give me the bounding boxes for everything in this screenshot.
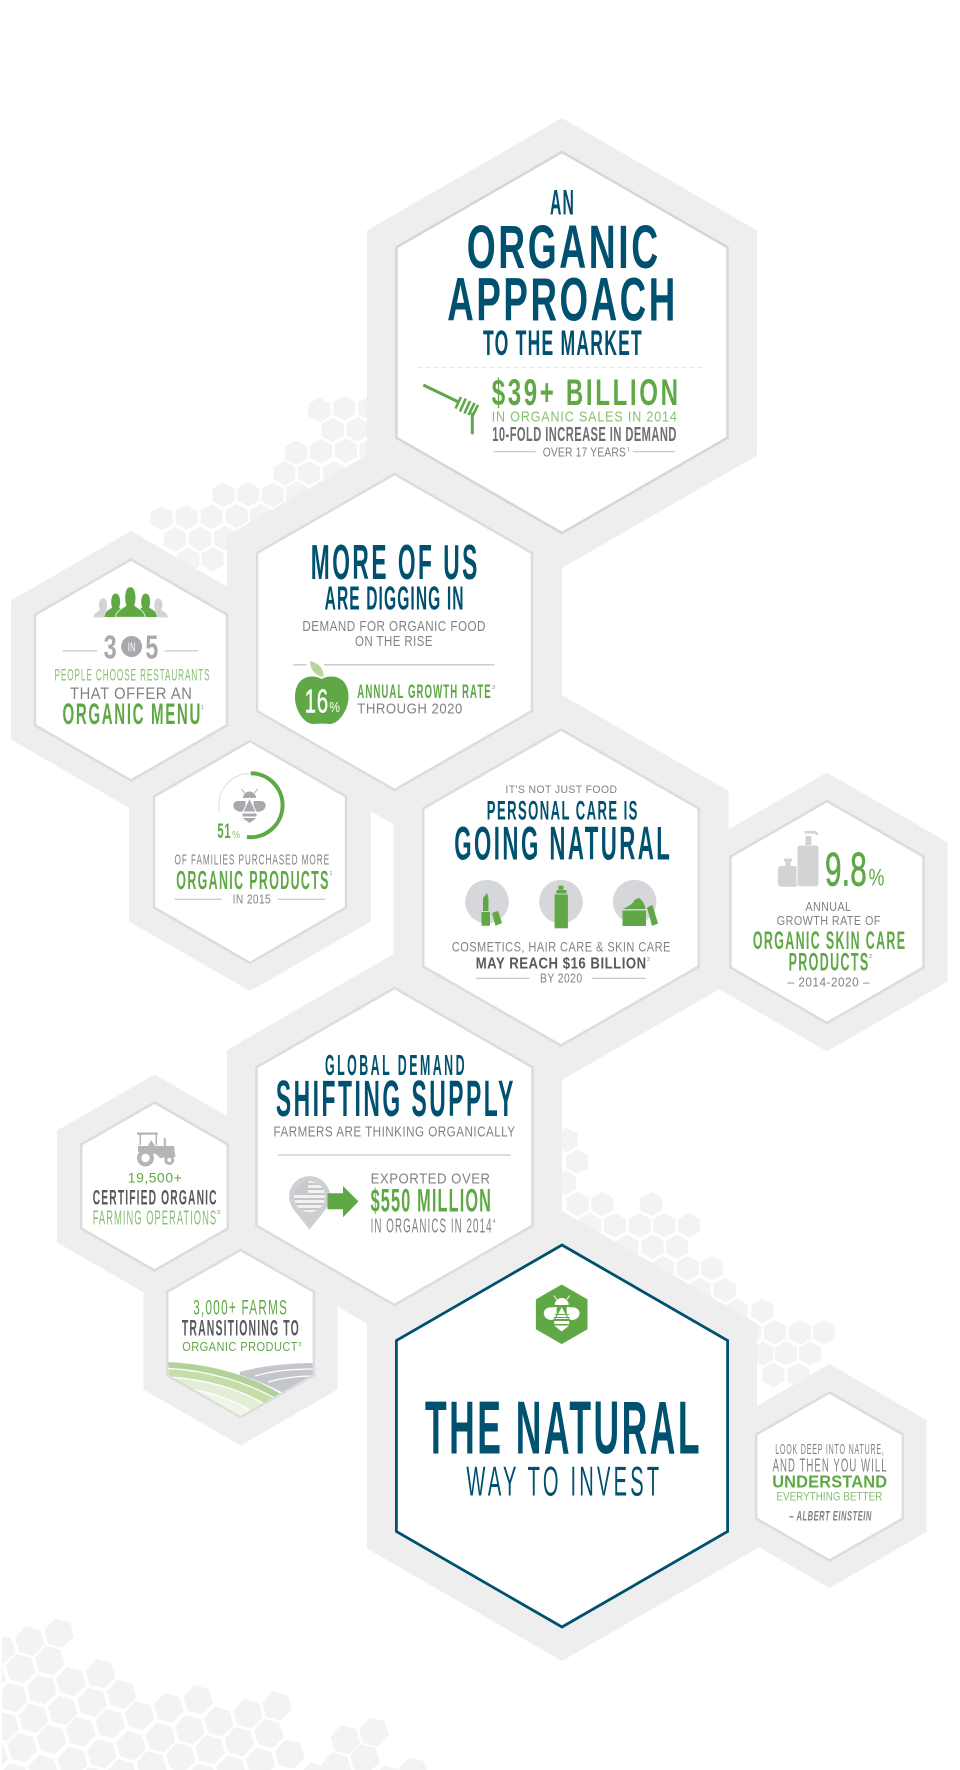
icon: skin care bottles: [778, 831, 819, 887]
heading: PERSONAL CARE IS: [487, 795, 639, 825]
illustration: fields: [168, 1362, 313, 1416]
subheading: ON THE RISE: [355, 634, 433, 650]
quote: – ALBERT EINSTEIN: [789, 1508, 872, 1524]
panel: global demand shifting supply: [256, 988, 532, 1305]
heading: [276, 1050, 516, 1127]
growth rate text: ANNUAL GROWTH RATE: [357, 681, 492, 703]
sales figure: 1: [627, 447, 630, 453]
farming text: 19,500+: [128, 1171, 182, 1186]
icon: apple 16%: %: [329, 699, 341, 716]
growth rate text: 3: [492, 685, 495, 691]
panel: 3 in 5: [35, 560, 227, 780]
sales figure: OVER 17 YEARS: [543, 445, 626, 459]
panel: more of us are digging in: [257, 474, 532, 790]
panel: 51% of families: [154, 741, 346, 963]
quote: UNDERSTAND: [772, 1472, 887, 1492]
icon: export arrow: [328, 1186, 358, 1217]
skin care text: – 2014-2020 –: [788, 976, 870, 990]
heading: [311, 535, 480, 616]
infographic canvas: SHIFTING SUPPLY: [276, 1070, 516, 1127]
growth figure: 9.8: [825, 843, 867, 896]
closing title: WAY TO INVEST: [466, 1458, 662, 1505]
export text: EXPORTED OVER: [371, 1171, 491, 1187]
farms text: 3,000+ FARMS: [193, 1296, 288, 1319]
icon: skin care jar: [613, 880, 658, 926]
3 in 5 statistic: IN: [128, 640, 136, 654]
icon: US map pin: [289, 1176, 330, 1230]
export text: 4: [492, 1219, 496, 1225]
icon: lipstick: [465, 880, 509, 926]
icon: people group: [93, 587, 168, 617]
growth rate text: THROUGH 2020: [357, 700, 463, 717]
farming text: 3: [217, 1210, 220, 1216]
panel: 51% of families: ORGANIC PRODUCTS: [176, 867, 330, 895]
panel: certified organic farming operations: [81, 1102, 228, 1270]
background honeycomb: bottom left: [0, 1618, 428, 1770]
skin care text: [753, 899, 906, 990]
icon: apple 16%: 16: [305, 683, 329, 720]
panel: an organic approach to the market: [396, 152, 728, 533]
growth rate text: [357, 681, 495, 717]
market projection text: COSMETICS, HAIR CARE & SKIN CARE: [452, 940, 671, 955]
families text: [174, 852, 333, 907]
panel: certified organic farming operations: FARMING OPERATIONS: [93, 1207, 217, 1229]
skin care text: ANNUAL: [805, 899, 851, 914]
sales figure: $39+ BILLION: [492, 372, 681, 413]
icon: tractor: [137, 1132, 176, 1166]
icon: apple 16%: [295, 661, 349, 724]
panel: 3 in 5: PEOPLE CHOOSE RESTAURANTS: [54, 666, 210, 685]
heading: [454, 784, 672, 870]
market projection text: 2: [647, 957, 650, 963]
restaurant text: THAT OFFER AN: [70, 684, 192, 703]
heading: ARE DIGGING IN: [325, 579, 465, 616]
market projection text: [452, 940, 671, 985]
subheading: [302, 619, 486, 650]
market projection text: BY 2020: [540, 971, 582, 985]
panel: farms transitioning: [167, 1250, 314, 1425]
3 in 5 statistic: 3: [104, 629, 118, 666]
51 percent label: %: [232, 830, 241, 841]
title: TO THE MARKET: [483, 324, 643, 363]
3 in 5 statistic: 5: [145, 629, 159, 666]
3 in 5 statistic: [63, 629, 198, 666]
market projection text: MAY REACH $16 BILLION: [476, 955, 647, 972]
farms text: 3: [298, 1342, 302, 1348]
panel: the natural way to invest: [396, 1245, 728, 1627]
families text: IN 2015: [233, 893, 271, 907]
background honeycomb: upper left: [151, 396, 382, 572]
panel: personal care is going natural: GOING NATURAL: [454, 817, 672, 870]
panel: albert einstein quote: [756, 1392, 903, 1560]
51 percent label: 51: [217, 820, 231, 843]
icon: bee: [233, 789, 266, 823]
restaurant text: ORGANIC MENU: [62, 698, 202, 731]
farming text: [93, 1171, 220, 1229]
export text: [371, 1171, 496, 1237]
heading: IT'S NOT JUST FOOD: [505, 784, 617, 796]
title: AN: [550, 184, 575, 223]
restaurant text: 1: [201, 705, 204, 711]
quote: EVERYTHING BETTER: [776, 1492, 882, 1504]
subheading: FARMERS ARE THINKING ORGANICALLY: [274, 1125, 516, 1141]
skin care text: 2: [869, 954, 872, 960]
farming text: CERTIFIED ORGANIC: [93, 1186, 218, 1209]
sales figure: 10-FOLD INCREASE IN DEMAND: [492, 424, 677, 446]
background honeycomb: right: [554, 1128, 835, 1387]
donut chart 51%: [219, 773, 283, 837]
farms text: [182, 1296, 302, 1354]
title: APPROACH: [447, 266, 678, 334]
growth figure: %: [869, 865, 885, 892]
title: [447, 184, 678, 363]
icon: bee logo: [536, 1284, 588, 1344]
panel: farms transitioning: TRANSITIONING TO: [182, 1316, 300, 1341]
skin care text: GROWTH RATE OF: [777, 913, 881, 928]
families text: 1: [330, 871, 333, 877]
sales figure: [492, 372, 681, 459]
families text: OF FAMILIES PURCHASED MORE: [174, 852, 330, 868]
subheading: DEMAND FOR ORGANIC FOOD: [302, 619, 486, 635]
icon: honey dipper: [423, 385, 478, 433]
heading: GLOBAL DEMAND: [325, 1050, 467, 1082]
panel: personal care is going natural: [423, 730, 699, 1046]
farms text: ORGANIC PRODUCT: [182, 1339, 298, 1354]
icon: hair care bottle: [539, 880, 583, 928]
export text: $550 MILLION: [371, 1183, 492, 1219]
quote: [772, 1442, 888, 1524]
sales figure: IN ORGANIC SALES IN 2014: [492, 410, 678, 426]
export text: IN ORGANICS IN 2014: [371, 1215, 493, 1237]
skin care text: PRODUCTS: [789, 949, 870, 977]
panel: 9.8% skin care: [730, 801, 924, 1023]
restaurant text: [54, 666, 210, 731]
panel: more of us are digging in: MORE OF US: [311, 535, 480, 590]
closing title: [425, 1385, 702, 1505]
title: ORGANIC: [467, 213, 661, 281]
